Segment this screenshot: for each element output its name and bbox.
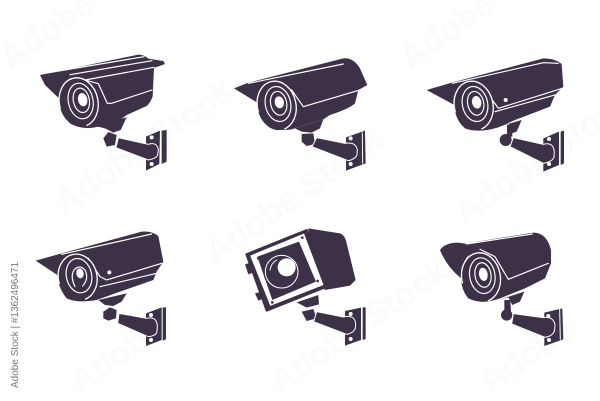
icon: security camera with smooth rounded housing — [234, 58, 367, 171]
text: Adobe — [63, 310, 171, 401]
text: Adobe Stock — [48, 71, 240, 222]
icon: security camera with finned roof — [40, 55, 167, 171]
text: Adobe — [473, 310, 581, 401]
icon: security camera with long angular housing — [427, 58, 564, 172]
icon: security camera with swirl lens — [36, 232, 166, 346]
stock image id caption: Adobe Stock | #1362496471 — [10, 262, 21, 388]
icon: security camera with curved visor — [440, 233, 563, 346]
icon: box security camera seen from front — [245, 228, 366, 346]
text: Adobe Stock — [263, 251, 455, 401]
text: Adobe Stock — [198, 121, 390, 272]
